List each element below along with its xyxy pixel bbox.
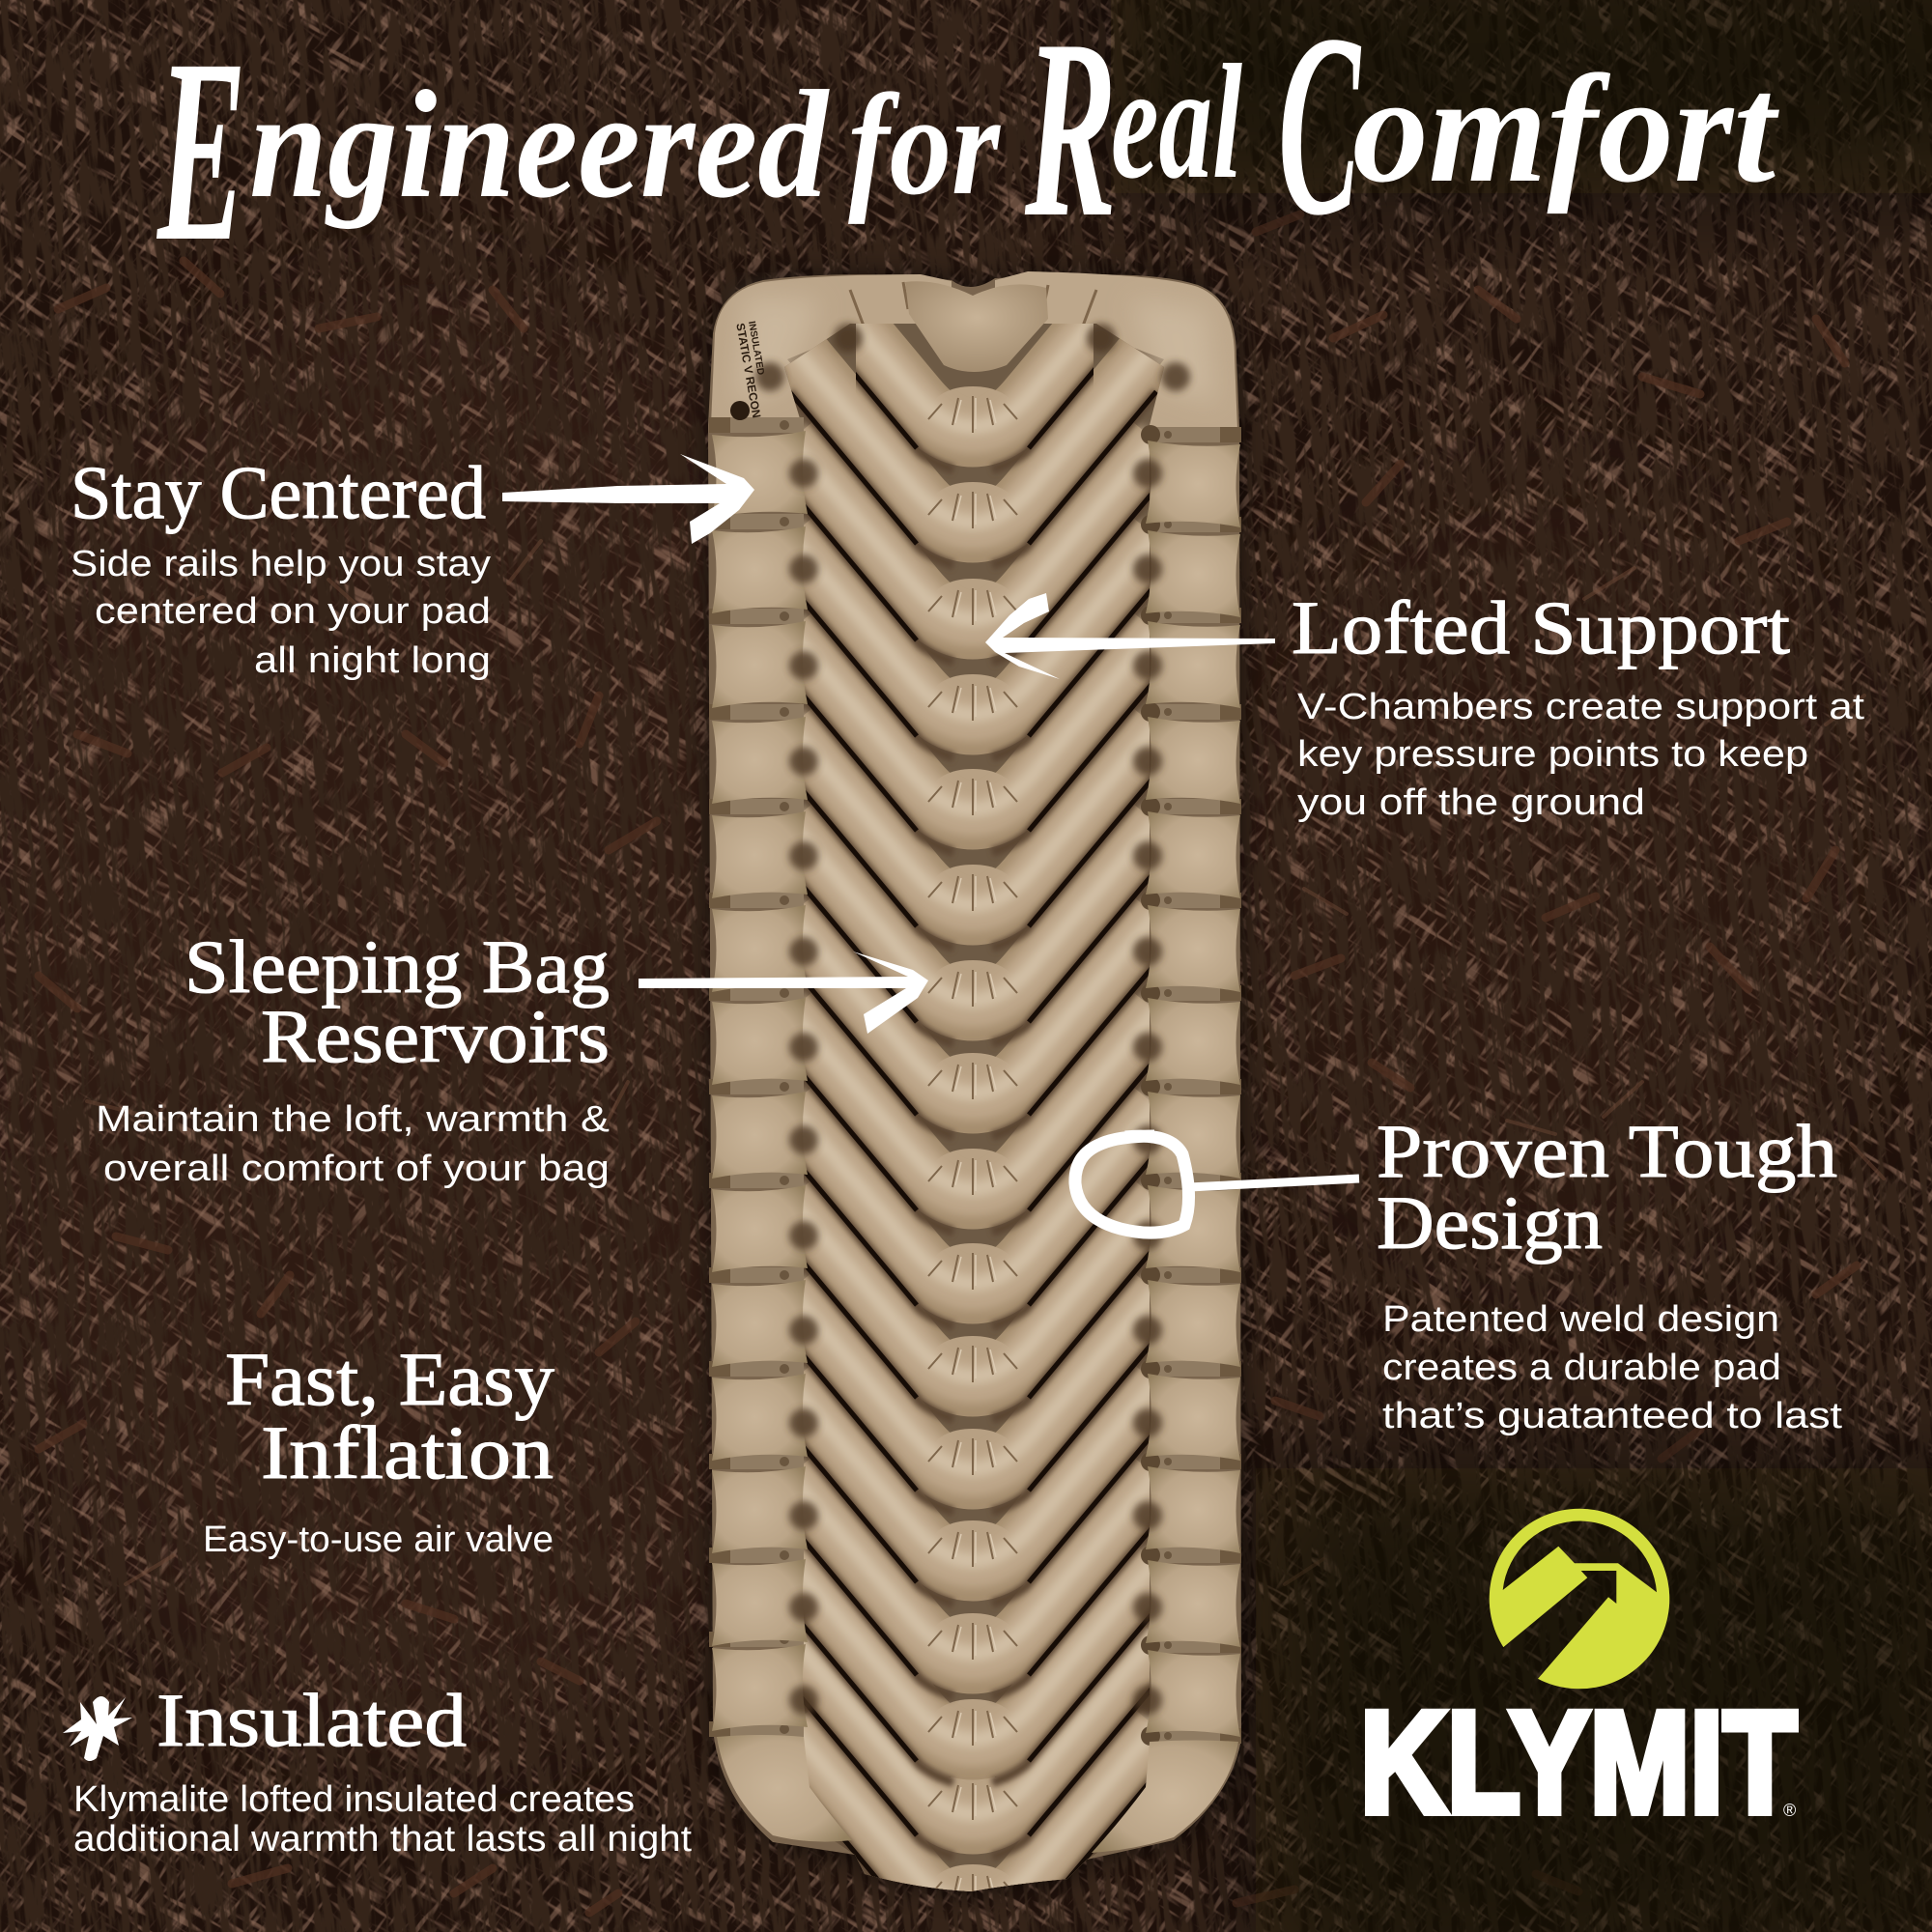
pad label: STATIC V RECON	[733, 322, 763, 419]
callout: Stay Centered: centered on your pad	[95, 591, 491, 632]
title: ngineered	[249, 58, 830, 230]
V-chamber tubes	[784, 243, 1166, 1932]
callout: Proven Tough Design	[1377, 1109, 1843, 1436]
callout: Stay Centered: all night long	[254, 640, 491, 681]
callout: Sleeping Bag Reservoirs	[96, 924, 610, 1189]
title: eal	[1111, 31, 1242, 213]
callout: Stay Centered: Stay Centered	[71, 450, 486, 534]
title: for	[848, 65, 1001, 225]
left side rail cells	[709, 417, 852, 1842]
callout: Fast, Easy Inflation	[203, 1337, 554, 1560]
callout: Insulated: additional warmth that lasts all night	[73, 1819, 692, 1860]
callout: Lofted Support: V-Chambers create support at	[1297, 687, 1865, 727]
callout: Stay Centered	[71, 450, 491, 681]
pad label logo	[730, 401, 750, 420]
title: E	[156, 5, 246, 296]
head cushion	[905, 281, 1048, 372]
right side rail cells	[1092, 425, 1241, 1853]
callout: Insulated: Insulated	[156, 1678, 467, 1762]
callout: Insulated: Klymalite lofted insulated creates	[73, 1779, 635, 1820]
callout: Fast, Easy Inflation: Easy-to-use air valve	[203, 1520, 554, 1560]
callout: Proven Tough Design: that’s guatanteed to last	[1382, 1396, 1843, 1436]
arrow: Sleeping Bag Reservoirs	[639, 952, 928, 1034]
callout: Proven Tough Design: Patented weld design	[1382, 1299, 1779, 1340]
callout: Proven Tough Design: Proven Tough	[1377, 1109, 1837, 1193]
callout: Proven Tough Design: creates a durable pad	[1382, 1348, 1781, 1388]
circle pointer: Proven Tough Design	[1075, 1136, 1359, 1233]
callout: Insulated	[73, 1678, 692, 1860]
callout: Stay Centered: Side rails help you stay	[71, 544, 491, 584]
callout: Lofted Support	[1292, 585, 1865, 823]
callout: Lofted Support: key pressure points to keep	[1297, 734, 1808, 775]
callout: Sleeping Bag Reservoirs: Sleeping Bag	[185, 924, 610, 1009]
weld dimples	[755, 324, 1190, 1715]
sleeping pad	[708, 243, 1241, 1932]
callout: Sleeping Bag Reservoirs: overall comfort of your bag	[103, 1149, 610, 1189]
callout: Sleeping Bag Reservoirs: Maintain the loft, warmth &	[96, 1099, 610, 1140]
callout: Lofted Support: you off the ground	[1297, 782, 1645, 823]
title: omfort	[1352, 43, 1779, 214]
pad label: INSULATED	[746, 321, 766, 376]
pad base silhouette	[708, 274, 1241, 1891]
head section corners	[711, 271, 1237, 433]
arrow: Stay Centered	[502, 454, 754, 544]
logo: KLYMIT wordmark: ®	[1783, 1801, 1796, 1820]
logo: KLYMIT wordmark: KLYMIT	[1360, 1681, 1797, 1843]
arrow: Lofted Support	[985, 593, 1275, 679]
callout: Fast, Easy Inflation: Fast, Easy	[225, 1337, 554, 1421]
logo: Klymit mountain badge	[1490, 1509, 1669, 1689]
icon: insulation star	[63, 1696, 132, 1761]
callout: Proven Tough Design: Design	[1377, 1180, 1603, 1264]
callout: Fast, Easy Inflation: Inflation	[261, 1410, 554, 1494]
callout: Sleeping Bag Reservoirs: Reservoirs	[261, 994, 610, 1078]
callout: Lofted Support: Lofted Support	[1292, 585, 1790, 669]
